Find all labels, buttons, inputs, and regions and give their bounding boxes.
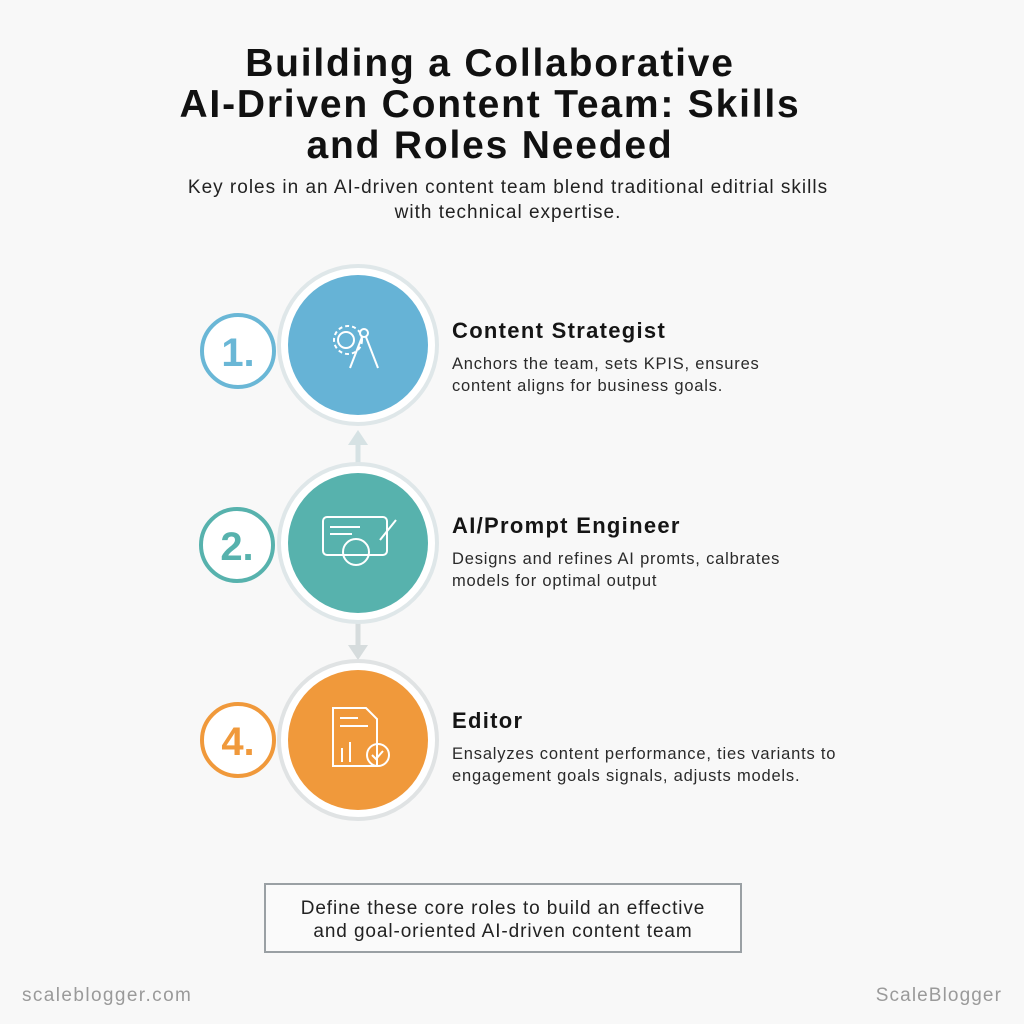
title: Building a Collaborative (245, 42, 735, 85)
subtitle: Key roles in an AI-driven content team blend traditional editrial skills (188, 177, 828, 198)
subtitle: with technical expertise. (395, 202, 621, 223)
role 2 text: Designs and refines AI promts, calbrates (452, 550, 780, 568)
title: AI-Driven Content Team: Skills (179, 83, 801, 126)
callout box (264, 883, 742, 953)
footer right: ScaleBlogger (876, 985, 1002, 1006)
callout box: Define these core roles to build an effective (301, 898, 705, 919)
step 4 (202, 661, 437, 819)
arrow: up (348, 430, 368, 470)
callout box: and goal-oriented AI-driven content team (313, 921, 693, 942)
title: and Roles Needed (307, 124, 673, 167)
role 4 text (452, 708, 836, 785)
role 1 text: Content Strategist (452, 318, 666, 343)
role 1 text: content aligns for business goals. (452, 377, 723, 395)
role 1 text: Anchors the team, sets KPIS, ensures (452, 355, 760, 373)
step 2: 2. (220, 525, 254, 569)
footer left: scaleblogger.com (22, 985, 192, 1006)
subtitle (188, 177, 828, 223)
role 4 text: Editor (452, 708, 523, 733)
title (179, 42, 801, 167)
role 2 text: AI/Prompt Engineer (452, 513, 681, 538)
role 4 text: Ensalyzes content performance, ties variants to (452, 745, 836, 763)
arrow: down (348, 620, 368, 660)
step 2 (201, 464, 437, 622)
role 4 text: engagement goals signals, adjusts models. (452, 767, 800, 785)
role 2 text (452, 513, 780, 590)
step 1 (202, 266, 437, 424)
role 1 text (452, 318, 760, 395)
step 4: 4. (221, 720, 255, 764)
role 2 text: models for optimal output (452, 572, 657, 590)
step 1: 1. (221, 331, 255, 375)
